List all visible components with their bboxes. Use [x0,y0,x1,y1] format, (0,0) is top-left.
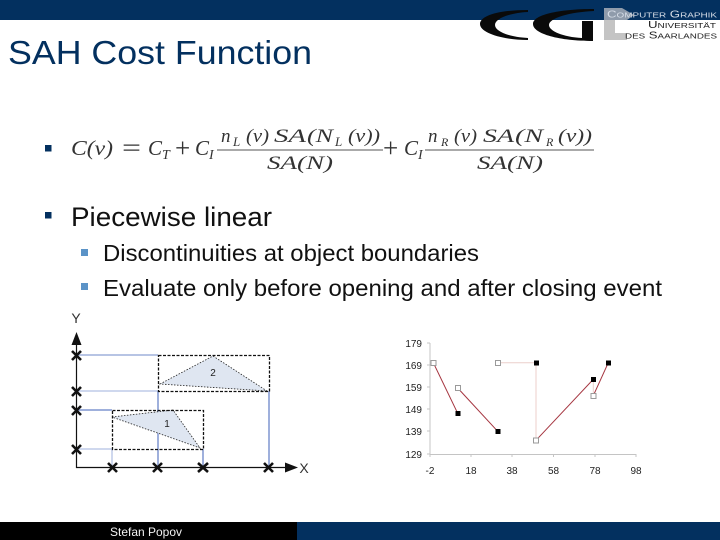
formula: SA(N) [477,153,543,174]
chart axes [427,343,636,457]
bounding boxes [112,356,270,450]
sub-bullet: evaluate: Evaluate only before opening and after closing event [103,275,662,301]
bullet: Piecewise linear: Piecewise linear [71,202,272,232]
logo: C OMPUTER G RAPHIK [607,10,717,20]
triangle 1 [112,410,200,448]
left numerator: L [232,134,240,149]
y tick labels [405,339,422,461]
left numerator: SA [274,126,307,147]
object boundary diagram: 1 [164,419,170,430]
right numerator: SA [483,126,515,147]
formula: C [195,136,210,160]
object labels: 2 [210,368,216,379]
axis labels: Y [71,310,81,326]
presenter name: Stefan Popov [110,525,182,539]
right numerator: (v)) [558,126,592,147]
continuous segments [433,363,608,440]
logo: DES S AARLANDES [625,30,717,42]
right numerator: (N [515,126,545,147]
formula: SA(N) [267,153,333,174]
filled markers [456,360,611,434]
right numerator: n [428,126,438,147]
x tick labels [426,466,642,477]
bullet marker [45,145,52,152]
title: SAH Cost Function [8,34,312,71]
object boundary diagram: X [299,460,309,476]
formula: T [162,148,171,163]
x tick labels: 38 [506,466,518,477]
formula: + [175,133,190,163]
x tick labels: 98 [630,466,642,477]
left numerator: n [221,126,230,147]
object boundary diagram [71,310,309,476]
axes [76,345,288,468]
y tick labels: 129 [405,450,422,461]
header band [0,0,720,20]
sub-bullet: discontinuities: Discontinuities at object boundaries [103,240,479,266]
formula: C(v) [71,136,113,160]
x tick labels: 18 [465,466,477,477]
logo: U NIVERSITÄT [648,20,717,31]
logo [480,8,717,42]
y tick labels: 169 [405,361,422,372]
footer band [0,522,720,540]
x tick labels: -2 [426,466,435,477]
discontinuity segments [498,363,593,440]
cost function chart [405,339,642,477]
formula: C [404,136,419,160]
formula: I [417,148,424,163]
right numerator: R [545,135,554,149]
projection lines [76,355,269,467]
open markers [431,360,596,443]
triangle 2 [160,356,267,391]
axis arrows [72,332,298,472]
left numerator: (v) [246,126,269,147]
x tick labels: 78 [589,466,601,477]
x tick labels: 58 [548,466,559,477]
right numerator [428,126,592,149]
left numerator [221,126,380,149]
y tick labels: 179 [405,339,422,350]
formula bullet [45,126,594,174]
y tick labels: 149 [405,405,422,416]
formula: I [208,148,215,163]
formula [71,126,594,174]
left numerator: (N [307,126,335,147]
left numerator: L [334,134,342,149]
y tick labels: 139 [405,427,422,438]
right numerator: (v) [454,126,477,147]
formula: C [148,136,163,160]
formula: + [383,133,398,163]
event crosses [72,351,273,472]
right numerator: R [440,135,449,149]
left numerator: (v)) [348,126,380,147]
y tick labels: 159 [405,383,422,394]
formula: = [122,135,141,162]
